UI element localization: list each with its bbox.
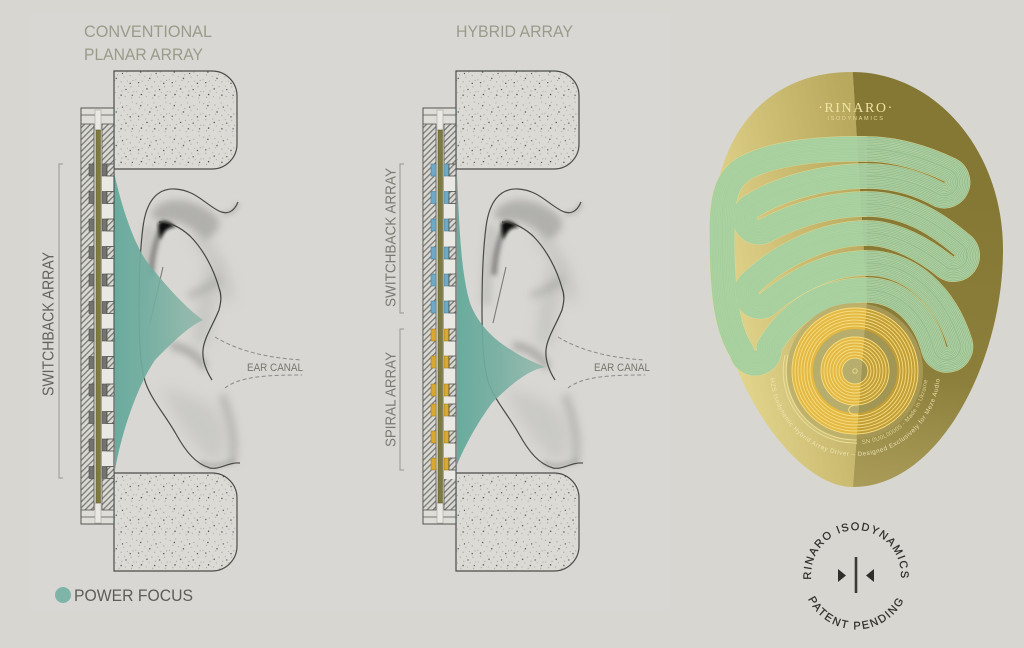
diaphragm left half xyxy=(720,72,867,487)
driver diaphragm xyxy=(709,72,1003,487)
diaphragm right half xyxy=(852,72,1003,487)
legend: power focus xyxy=(55,586,193,605)
switchback magnets xyxy=(431,164,456,313)
legend text: POWER FOCUS xyxy=(74,586,193,605)
magnet rows xyxy=(89,164,114,478)
badge bottom text: PATENT PENDING xyxy=(808,596,903,630)
switchback label, hybrid: SWITCHBACK ARRAY xyxy=(382,168,400,307)
spiral label: SPIRAL ARRAY xyxy=(382,352,400,447)
background panel xyxy=(28,14,670,611)
spiral bracket xyxy=(400,329,404,470)
badge right arrow xyxy=(866,569,874,582)
foam ear pads xyxy=(114,71,237,571)
diagram: conventional planar array xyxy=(81,71,303,571)
switchback label, left: SWITCHBACK ARRAY xyxy=(40,252,58,396)
heading: hybrid array: HYBRID ARRAY xyxy=(456,23,573,41)
power focus beam xyxy=(114,172,203,470)
ear illustration xyxy=(139,189,302,468)
serial number text: SN 0U0L00005 - Made in Ukraine xyxy=(862,380,928,444)
patent badge xyxy=(803,522,909,630)
driver frame xyxy=(423,108,456,524)
switchback coil xyxy=(722,149,967,363)
driver frame xyxy=(81,108,114,524)
foam ear pads xyxy=(456,71,579,571)
legend swatch xyxy=(55,587,71,603)
logo: rinaro: ·RINARO· xyxy=(818,101,894,116)
heading: conventional planar array: CONVENTIONAL xyxy=(84,23,212,41)
badge center bar xyxy=(855,557,857,593)
spiral magnets xyxy=(431,329,456,470)
logo: isodynamics: ISODYNAMICS xyxy=(827,116,885,122)
badge top text: RINARO ISODYNAMICS xyxy=(803,522,909,579)
heading: conventional planar array: PLANAR ARRAY xyxy=(84,46,203,64)
spiral coil xyxy=(783,303,923,443)
badge left arrow xyxy=(838,569,846,582)
switchback bracket, left xyxy=(59,164,63,478)
diaphragm arc text: HZS Isodynamic Hybrid Array Driver – Designed Exclusively for Meze Audio xyxy=(770,378,940,456)
power focus beam xyxy=(457,175,545,465)
ear canal label: EAR CANAL xyxy=(247,362,303,374)
ear illustration xyxy=(482,189,645,468)
ear canal label: EAR CANAL xyxy=(594,362,650,374)
heading: conventional planar array xyxy=(84,23,212,64)
switchback bracket, hybrid xyxy=(400,164,404,313)
diagram: hybrid array xyxy=(423,71,650,571)
